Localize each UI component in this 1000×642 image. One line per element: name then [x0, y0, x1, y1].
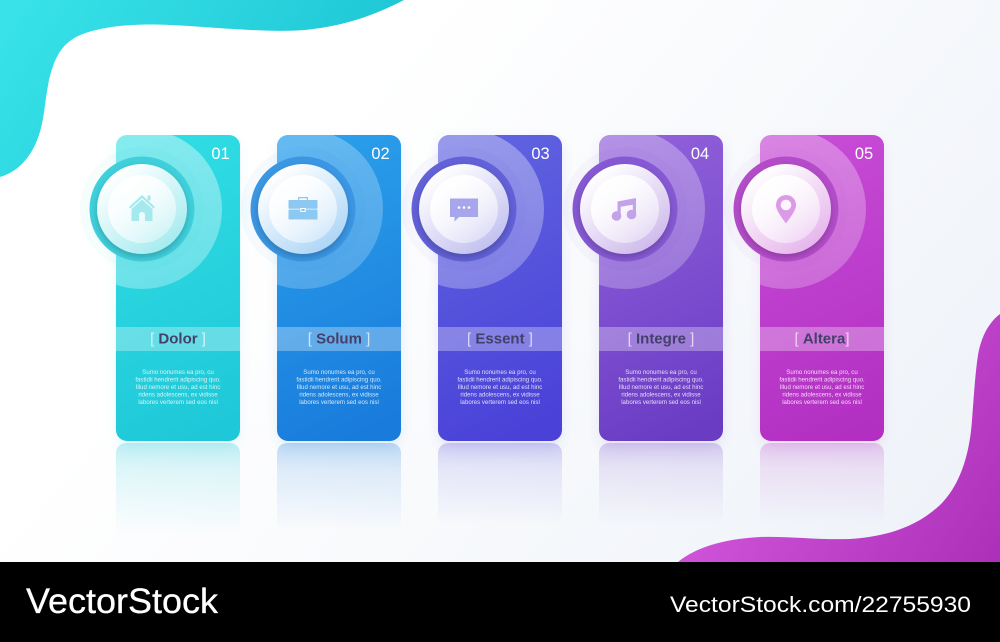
body text: step 3: labores verterem sed eos nisl	[460, 399, 540, 406]
card: step 2	[277, 135, 401, 441]
halo: step 5	[724, 147, 848, 271]
card: step 3	[438, 135, 562, 441]
body text: step 5: ridens adolescens, ex vidisse	[782, 392, 862, 398]
body text: step 5: Illud nemore et usu, ad est hinc	[780, 384, 864, 391]
halo: step 2	[241, 147, 365, 271]
body text: step 2: Illud nemore et usu, ad est hinc	[297, 384, 381, 391]
card: step 5	[760, 135, 884, 441]
reflection: step 3	[438, 443, 562, 525]
body text: step 4: fastidii hendrerit adipiscing quo.	[618, 376, 704, 384]
body text: step 3: ridens adolescens, ex vidisse	[460, 392, 540, 398]
body text: step 5: labores verterem sed eos nisl	[782, 399, 862, 406]
halo: step 3	[402, 147, 526, 271]
ring: step 3	[412, 156, 516, 262]
band: step 4	[599, 327, 723, 351]
panel: step 3	[412, 135, 564, 502]
reflection: step 5	[760, 443, 884, 525]
body text: step 1: Illud nemore et usu, ad est hinc	[136, 384, 220, 391]
panel: step 5	[734, 135, 886, 504]
arc: step 4	[599, 135, 705, 289]
heading: step 5: [ Altera]	[794, 330, 850, 348]
panel: step 2	[241, 135, 404, 514]
card shadow: step 5	[762, 141, 882, 445]
halo: step 1	[80, 147, 204, 271]
inner disc: step 4	[591, 175, 659, 243]
blob: bottom right	[678, 314, 1000, 562]
body text: step 1: labores verterem sed eos nisl	[138, 399, 218, 406]
card: step 1	[116, 135, 240, 441]
body text: step 5: Sumo nonumes ea pro, cu	[786, 369, 858, 376]
card shadow: step 4	[601, 141, 721, 445]
card shadow: step 1	[118, 141, 238, 445]
ring: step 5	[734, 156, 838, 262]
inner disc: step 5	[752, 175, 820, 243]
number: step 2: 02	[371, 145, 390, 163]
icon: music note	[612, 198, 636, 221]
reflection: step 2	[277, 443, 401, 531]
heading: step 1: [ Dolor ]	[150, 330, 206, 348]
ring: step 1	[90, 156, 194, 262]
inner disc: step 1	[108, 175, 176, 243]
inner disc: step 2	[269, 175, 337, 243]
heading: step 3: [ Essent ]	[467, 330, 533, 348]
number: step 1: 01	[211, 145, 230, 163]
band: step 1	[116, 327, 240, 351]
body text: step 2: ridens adolescens, ex vidisse	[299, 392, 379, 398]
arc: step 2	[277, 135, 383, 289]
arc: step 1	[116, 135, 222, 289]
icon: chat bubble	[450, 198, 478, 222]
card shadow: step 2	[279, 141, 399, 445]
band: step 3	[438, 327, 562, 351]
number: step 4: 04	[691, 145, 709, 163]
inner disc: step 3	[430, 175, 498, 243]
blob: top left	[0, 0, 404, 177]
body text: step 3: fastidii hendrerit adipiscing quo.	[457, 376, 543, 384]
band: step 2	[277, 327, 401, 351]
number: step 5: 05	[855, 145, 873, 163]
body text: step 2: fastidii hendrerit adipiscing quo.	[296, 376, 382, 384]
arc: step 5	[760, 135, 866, 289]
arc: step 3	[438, 135, 544, 289]
reflection: step 4	[599, 443, 723, 525]
disc: step 4	[580, 164, 670, 254]
panel: step 4	[572, 135, 724, 502]
body text: step 4: Illud nemore et usu, ad est hinc	[619, 384, 703, 391]
disc: step 2	[258, 164, 348, 254]
disc: step 3	[419, 164, 509, 254]
icon: house	[129, 195, 155, 221]
icon: map pin	[776, 195, 796, 224]
body text: step 1: Sumo nonumes ea pro, cu	[142, 369, 214, 376]
body text: step 5: fastidii hendrerit adipiscing quo.	[779, 376, 865, 384]
number: step 3: 03	[531, 145, 550, 163]
panel: step 1	[80, 135, 242, 518]
body text: step 3: Illud nemore et usu, ad est hinc	[458, 384, 542, 391]
footer bar	[0, 562, 1000, 642]
heading: step 2: [ Solum ]	[308, 330, 370, 348]
body text: step 2: labores verterem sed eos nisl	[299, 399, 379, 406]
footer url: VectorStock.com/22755930	[670, 592, 971, 617]
disc: step 1	[97, 164, 187, 254]
ring: step 2	[250, 156, 356, 262]
card: step 4	[599, 135, 723, 441]
body text: step 2: Sumo nonumes ea pro, cu	[303, 369, 375, 376]
body text: step 4: Sumo nonumes ea pro, cu	[625, 369, 697, 376]
halo: step 4	[563, 147, 687, 271]
body text: step 1: fastidii hendrerit adipiscing quo.	[135, 376, 221, 384]
ring: step 4	[572, 156, 678, 262]
heading: step 4: [ Integre ]	[628, 330, 694, 348]
band: step 5	[760, 327, 884, 351]
icon: briefcase	[288, 197, 318, 220]
body text: step 4: ridens adolescens, ex vidisse	[621, 392, 701, 398]
body text: step 4: labores verterem sed eos nisl	[621, 399, 701, 406]
card shadow: step 3	[440, 141, 560, 445]
disc: step 5	[741, 164, 831, 254]
reflection: step 1	[116, 443, 240, 535]
body text: step 3: Sumo nonumes ea pro, cu	[464, 369, 536, 376]
footer logo: VectorStock	[26, 582, 219, 621]
body text: step 1: ridens adolescens, ex vidisse	[138, 392, 218, 398]
